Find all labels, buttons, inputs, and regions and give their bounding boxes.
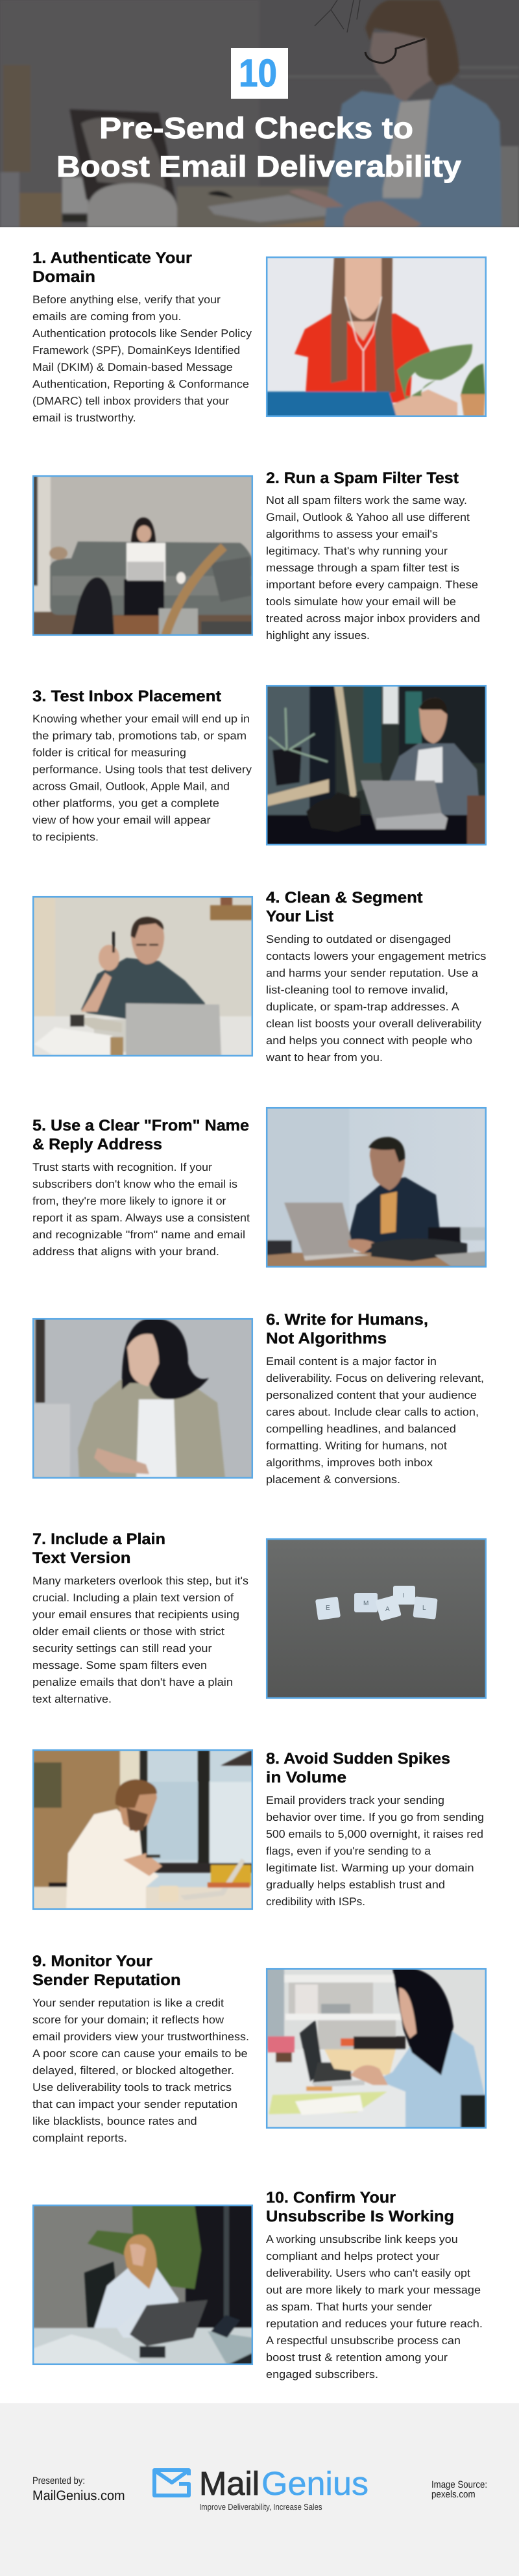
tagline: Improve Deliverability, Increase Sales [199,2502,322,2512]
photo: man in navy jacket at laptop [266,1107,487,1268]
text: step 1 body: (DMARC) tell inbox providers that your [32,395,229,407]
text: step 6 body: compelling headlines, and balanced [266,1423,456,1435]
text: step 9 body: that can impact your sender reputation [32,2098,237,2110]
heading: step 10 [266,2189,454,2225]
text: step 4 body [265,933,487,1064]
panel: step 10 [32,2189,483,2381]
text: step 4 body: and harms your sender reputation. Use a [266,967,479,979]
photo: man in white shirt by window [32,1749,253,1910]
text: step 1 body: Authentication protocols like Sender Policy [32,327,252,340]
text: step 9 body: score for your domain; it reflects how [32,2014,224,2026]
photo: woman with dark hair [32,1318,253,1479]
text: step 8 body: flags, even if you're sending to a [266,1845,431,1857]
heading: step 7: Text Version [32,1549,131,1567]
text: step 4 body: Sending to outdated or disengaged [266,933,451,945]
heading: step 4: Your List [266,908,333,925]
text: step 1 body: Framework (SPF), DomainKeys Identified [32,344,240,356]
photo: EMAIL letter keys on grey: E [326,1605,330,1612]
text: step 2 body: legitimacy. That's why running your [266,545,448,557]
heading: step 5 [32,1117,249,1153]
header background photo [0,0,519,227]
heading: step 10: Unsubscribe Is Working [266,2208,454,2225]
text: step 8 body: credibility with ISPs. [266,1895,365,1908]
text: step 5 body: and recognizable "from" name and email [32,1229,245,1241]
text: step 7 body: Many marketers overlook this step, but it's [32,1575,248,1587]
text: step 10 body: boost trust & retention among your [266,2351,448,2364]
panel: step 9 [32,1953,487,2144]
text: step 1 body [32,294,252,424]
image source: Image Source: [431,2479,487,2490]
photo: EMAIL letter keys on grey [266,1538,487,1699]
number badge: 10 [239,51,277,95]
text: step 7 body: older email clients or those with strict [32,1625,224,1638]
text: step 1 body: Authentication, Reporting & Conformance [32,378,249,390]
text: step 4 body: contacts lowers your engagement metrics [266,950,487,962]
photo: EMAIL letter keys on grey: L [422,1605,426,1612]
text: step 3 body: the primary tab, promotions tab, or spam [32,730,247,742]
text: step 6 body: algorithms, improves both inbox [266,1457,433,1469]
text: step 3 body: Knowing whether your email will end up in [32,713,250,725]
text: step 5 body [32,1161,250,1258]
heading: step 8: in Volume [266,1769,346,1786]
heading: step 5: 5. Use a Clear "From" Name [32,1117,249,1134]
text: step 7 body: your email ensures that recipients using [32,1608,239,1621]
text: step 8 body: Email providers track your sending [266,1794,444,1807]
heading: step 3: 3. Test Inbox Placement [32,688,221,705]
text: step 6 body: cares about. Include clear calls to action, [266,1406,479,1418]
text: step 6 body: Email content is a major factor in [266,1355,437,1368]
panel: step 8 [32,1749,484,1910]
text: step 4 body: list-cleaning tool to remove invalid, [266,984,448,996]
heading: step 8: 8. Avoid Sudden Spikes [266,1750,450,1768]
heading: step 1: Domain [32,268,95,286]
text: step 9 body: delayed, filtered, or blocked altogether. [32,2064,234,2077]
text: step 5 body: address that aligns with your brand. [32,1245,219,1258]
photo: woman in red shirt [266,256,487,417]
panel: step 5 [32,1107,487,1268]
icon: envelope [154,2470,189,2495]
text: step 10 body [266,2233,483,2381]
text: step 5 body: report it as spam. Always use a consistent [32,1212,250,1224]
text: step 6 body: personalized content that your audience [266,1389,477,1401]
text: step 1 body: Mail (DKIM) & Domain-based Message [32,361,233,373]
heading: step 4 [266,889,423,925]
text: step 2 body: Gmail, Outlook & Yahoo all use different [266,511,470,523]
text: step 6 body [266,1355,484,1486]
text: step 9 body: complaint reports. [32,2132,127,2144]
text: step 4 body: duplicate, or spam-trap addresses. A [266,1001,460,1013]
image source: pexels.com [431,2489,476,2500]
photo: EMAIL letter keys on grey: A [385,1606,390,1613]
heading: step 8 [266,1750,450,1786]
text: step 8 body: behavior over time. If you go from sending [266,1811,484,1823]
text: step 9 body: like blacklists, bounce rates and [32,2115,197,2127]
heading: step 6: Not Algorithms [266,1330,387,1347]
text: step 5 body: subscribers don't know who the email is [32,1178,237,1190]
text: step 5 body: from, they're more likely to ignore it or [32,1195,226,1207]
text: step 9 body: Use deliverability tools to track metrics [32,2081,232,2094]
photo: woman on grey sofa [32,475,253,636]
text: step 7 body: message. Some spam filters even [32,1659,207,1671]
panel: step 1 [32,249,487,424]
heading: step 9 [32,1953,181,1989]
text: step 10 body: as spam. That hurts your sender [266,2301,432,2313]
wordmark: Genius [261,2465,368,2502]
heading: step 1: 1. Authenticate Your [32,249,192,267]
text: step 8 body: gradually helps establish trust and [266,1879,445,1891]
heading: step 10: 10. Confirm Your [266,2189,396,2207]
title [56,111,461,183]
text: step 1 body: email is trustworthy. [32,412,136,424]
text: step 7 body: text alternative. [32,1693,112,1705]
text: step 8 body: legitimate list. Warming up your domain [266,1862,474,1874]
text: step 2 body: highlight any issues. [266,629,370,642]
wordmark: Mail [199,2465,260,2502]
text: step 6 body: placement & conversions. [266,1473,400,1486]
heading: step 5: & Reply Address [32,1136,162,1153]
text: step 7 body: penalize emails that don't have a plain [32,1676,233,1688]
photo: EMAIL letter keys on grey: I [403,1592,405,1599]
photo: man at laptop in cafe [266,685,487,845]
presented by: Presented by: [32,2475,85,2486]
text: step 7 body: crucial. Including a plain text version of [32,1592,234,1604]
text: step 6 body: formatting. Writing for humans, not [266,1440,447,1452]
heading: step 7 [32,1531,165,1567]
heading: step 9: Sender Reputation [32,1971,181,1989]
image source [431,2479,487,2500]
MailGenius logo [154,2465,368,2512]
panel: step 2 [32,469,480,642]
text: step 3 body [32,713,252,843]
footer [0,2403,519,2576]
text: step 10 body: out are more likely to mark your message [266,2284,481,2296]
text: step 4 body: want to hear from you. [265,1051,383,1064]
text: step 6 body: deliverability. Focus on delivering relevant, [266,1372,484,1384]
text: step 9 body [32,1997,249,2144]
text: step 7 body: security settings can still read your [32,1642,212,1655]
text: step 3 body: view of how your email will appear [32,814,211,826]
photo: woman at desk with plant [32,2205,253,2365]
heading: step 9: 9. Monitor Your [32,1953,152,1970]
title: Boost Email Deliverability [56,149,461,183]
number badge [231,48,288,99]
text: step 3 body: folder is critical for measuring [32,747,186,758]
text: step 3 body: other platforms, you get a complete [32,797,219,809]
presented by [32,2475,125,2503]
heading: step 6: 6. Write for Humans, [266,1311,428,1329]
text: step 8 body [266,1794,484,1908]
text: step 3 body: performance. Using tools that test delivery [32,764,252,775]
text: step 10 body: engaged subscribers. [266,2368,378,2381]
panel: step 7 [32,1531,487,1705]
text: step 1 body: Before anything else, verify that your [32,294,221,306]
text: step 2 body [266,494,480,642]
text: step 10 body: A working unsubscribe link keeps you [266,2233,458,2245]
presented by: MailGenius.com [32,2488,125,2503]
text: step 2 body: message through a spam filter test is [266,562,459,574]
text: step 4 body: and helps you connect with people who [266,1034,472,1047]
text: step 7 body [32,1575,248,1705]
panel: step 4 [32,889,487,1064]
text: step 2 body: tools simulate how your email will be [266,595,456,608]
panel: step 3 [32,685,487,845]
photo: woman at desk with phone [266,1968,487,2129]
text: step 9 body: email providers view your trustworthiness. [32,2031,249,2043]
photo: EMAIL letter keys on grey: M [363,1600,368,1607]
text: step 9 body: Your sender reputation is like a credit [32,1997,224,2009]
heading: step 1 [32,249,192,286]
header banner [0,0,519,227]
heading: step 2: 2. Run a Spam Filter Test [266,469,459,487]
wordmark [199,2465,368,2502]
text: step 2 body: important before every campaign. These [266,579,478,591]
text: step 8 body: 500 emails to 5,000 overnight, it raises red [266,1828,483,1840]
text: step 9 body: A poor score can cause your emails to be [32,2047,248,2060]
text: step 3 body: across Gmail, Outlook, Apple Mail, and [32,781,230,792]
heading: step 4: 4. Clean & Segment [266,889,423,907]
panel: step 6 [32,1311,484,1486]
text: step 2 body: treated across major inbox providers and [266,612,480,625]
photo: man with pen at desk [32,896,253,1057]
text: step 10 body: compliant and helps protect your [266,2250,440,2262]
text: step 2 body: algorithms to assess your email's [266,528,438,540]
heading: step 6 [266,1311,428,1347]
text: step 3 body: to recipients. [32,831,99,843]
text: step 4 body: clean list boosts your overall deliverability [266,1018,482,1030]
text: step 10 body: deliverability. Users who can't easily opt [266,2267,470,2279]
text: step 1 body: emails are coming from you. [32,310,182,323]
text: step 2 body: Not all spam filters work the same way. [266,494,467,506]
text: step 10 body: reputation and reduces your future reach. [266,2318,483,2330]
title: Pre-Send Checks to [99,111,413,145]
text: step 5 body: Trust starts with recognition. If your [32,1161,212,1173]
heading: step 7: 7. Include a Plain [32,1531,165,1548]
text: step 10 body: A respectful unsubscribe process can [266,2334,461,2347]
